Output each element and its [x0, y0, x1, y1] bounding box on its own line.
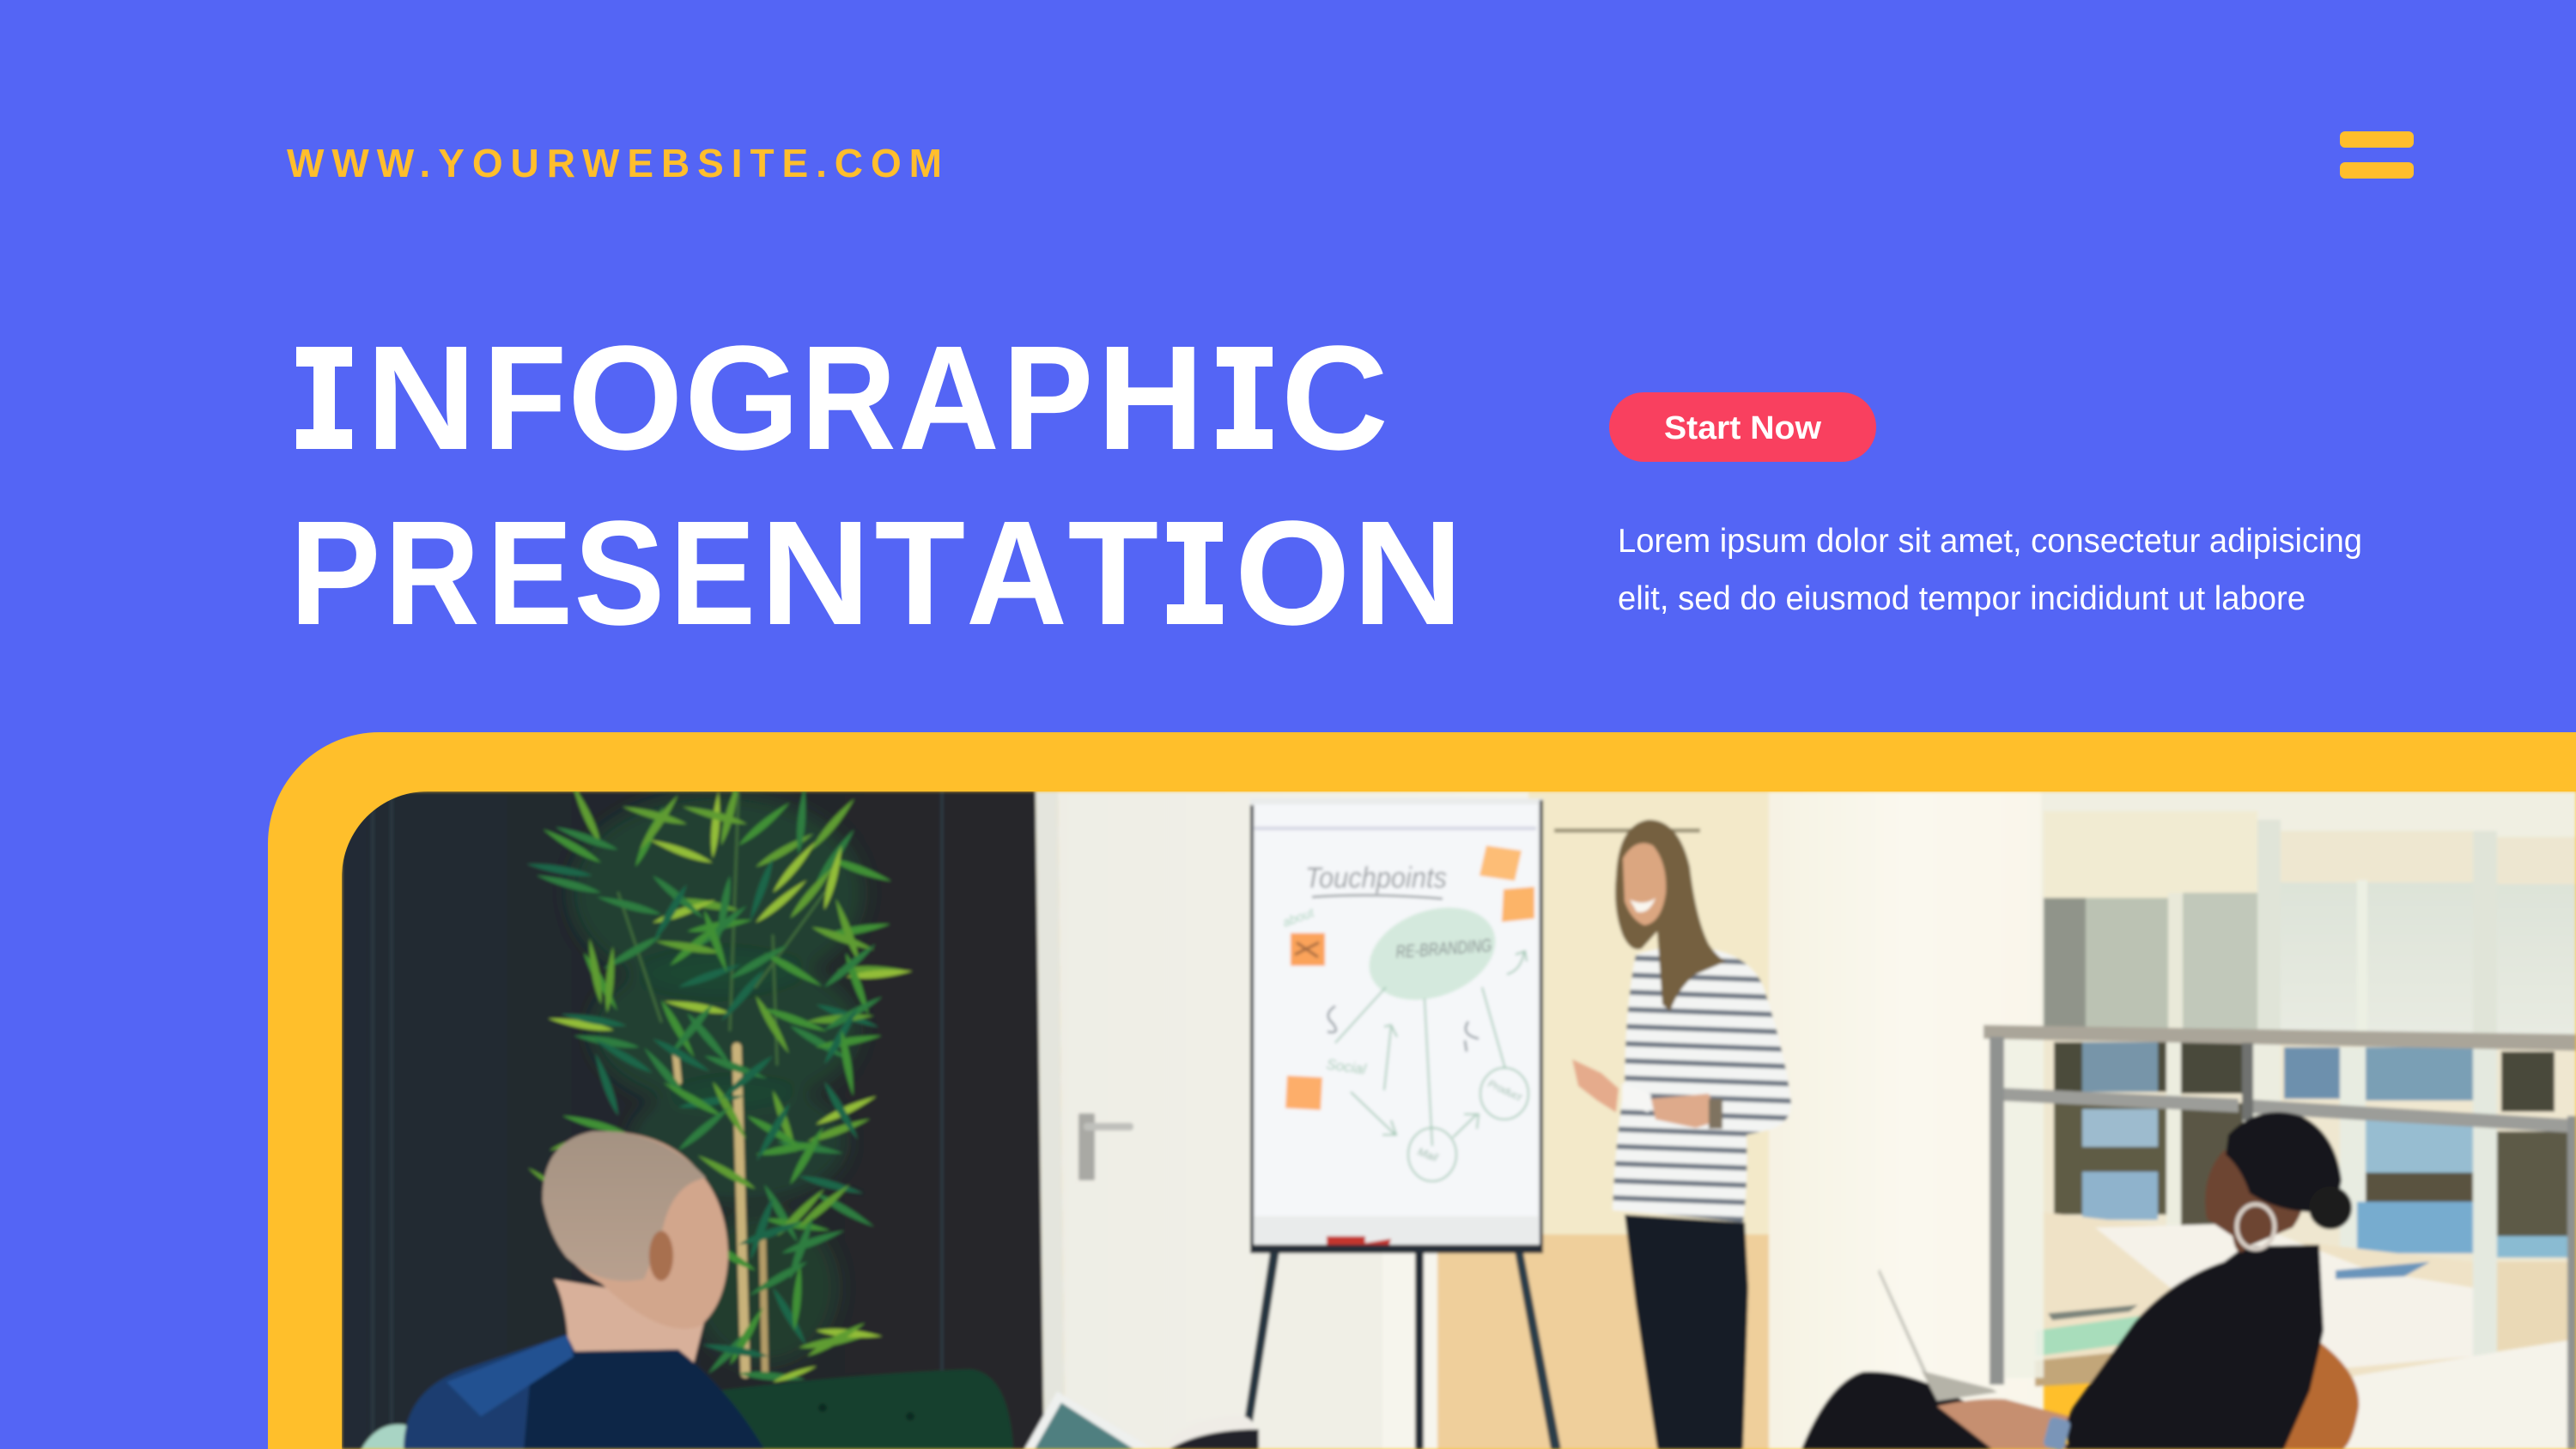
description text [1618, 523, 2362, 617]
title: R [385, 489, 480, 656]
seated man [361, 1131, 1013, 1449]
title: A [966, 489, 1067, 656]
title: O [568, 314, 683, 481]
title [289, 314, 1463, 656]
flipchart paper with notes: RE-BRANDING [1395, 936, 1492, 962]
title: I [1175, 489, 1216, 656]
title: I [304, 314, 345, 481]
title: C [1281, 314, 1388, 481]
website url: WWW.YOURWEBSITE.COM [287, 141, 942, 185]
pillar [1769, 791, 2044, 1449]
title: N [366, 314, 477, 481]
flipchart paper with notes: about [1281, 906, 1316, 931]
flipchart paper with notes: Product [1486, 1077, 1524, 1103]
title: G [684, 314, 800, 481]
windows upper [2041, 791, 2576, 1046]
title: F [483, 314, 567, 481]
title: E [487, 489, 573, 656]
title: A [898, 314, 999, 481]
button: start now: Start Now [1664, 410, 1821, 446]
title: E [670, 489, 756, 656]
title: T [874, 489, 965, 656]
standing woman [1572, 820, 1791, 1449]
laptop and shoe [1024, 1391, 1259, 1449]
flipchart paper with notes: Touchpoints [1305, 862, 1447, 894]
title: H [1097, 314, 1204, 481]
flipchart easel [1240, 798, 1561, 1449]
title: I [1224, 314, 1266, 481]
title: O [1235, 489, 1351, 656]
title: N [760, 489, 871, 656]
flipchart paper with notes [1255, 804, 1538, 1216]
title: N [1352, 489, 1463, 656]
icon: menu [2340, 131, 2414, 179]
title: P [1002, 314, 1093, 481]
photo: team meeting [342, 779, 2576, 1449]
description text: elit, sed do eiusmod tempor incididunt ut labore [1618, 580, 2306, 617]
button: start now [1609, 392, 1876, 462]
plant [526, 779, 913, 1385]
description text: Lorem ipsum dolor sit amet, consectetur adipisicing [1618, 523, 2362, 560]
flipchart paper with notes: Social [1325, 1056, 1368, 1078]
dark wall [342, 791, 1044, 1449]
yellow photo frame [268, 732, 2576, 1449]
windows lower with reflections [2005, 1034, 2576, 1449]
glass railing [1984, 1025, 2576, 1449]
seated woman [1801, 1113, 2359, 1449]
title: S [574, 489, 665, 656]
flipchart paper with notes: Mail [1416, 1145, 1441, 1164]
title: R [801, 314, 896, 481]
back wall and wood floor [1437, 791, 1781, 1449]
door and frame [1036, 791, 1528, 1449]
title: T [1068, 489, 1158, 656]
title: P [289, 489, 380, 656]
